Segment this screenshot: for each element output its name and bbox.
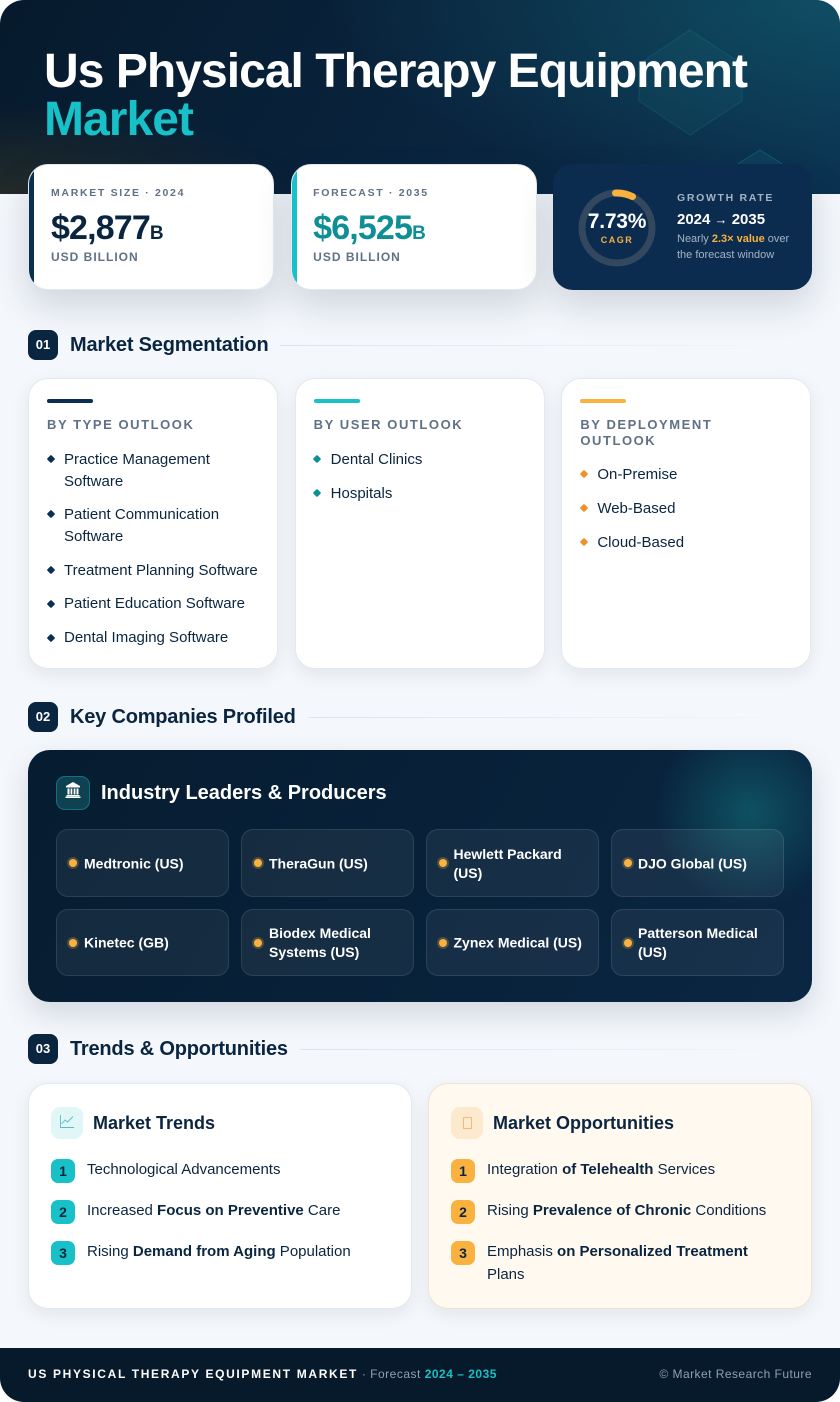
- company: Patterson: [611, 909, 784, 976]
- icon: bank building: [56, 776, 90, 810]
- growth rate text: GROWTH RATE: [677, 192, 774, 204]
- panel: by type outlook: Dental Imaging Software: [64, 629, 228, 646]
- stat card: forecast: FORECAST · 2035: [313, 187, 429, 199]
- section heading 02: [28, 702, 634, 732]
- panel: by type outlook: [28, 378, 278, 669]
- panel: market opportunities: Emphasis on Personalized Treatment: [487, 1243, 748, 1260]
- company: TheraGun: [241, 829, 414, 897]
- icon: opportunity placeholder: [451, 1107, 483, 1139]
- panel: by type outlook: Software: [64, 528, 123, 545]
- section heading 03: 03: [36, 1041, 50, 1056]
- section heading 03: [28, 1034, 632, 1064]
- section heading 01: 01: [36, 337, 50, 352]
- stat card: market size: [28, 164, 274, 290]
- stat card: growth rate: [553, 164, 812, 290]
- stat card: forecast: USD BILLION: [313, 250, 401, 264]
- panel: by deployment outlook: BY DEPLOYMENT: [580, 417, 712, 432]
- company: Hewlett Packard: Hewlett Packard (US): [454, 846, 562, 881]
- company: DJO Global: DJO Global (US): [638, 856, 747, 872]
- company: Hewlett Packard: [426, 829, 599, 897]
- company: Kinetec: [56, 909, 229, 976]
- panel: by deployment outlook: OUTLOOK: [580, 433, 656, 448]
- panel: market trends: 2: [59, 1204, 67, 1220]
- stat card: growth rate: 2024 → 2035: [677, 211, 765, 228]
- panel: market opportunities: 1: [459, 1163, 467, 1179]
- company: Zynex: Zynex Medical (US): [454, 934, 582, 950]
- stat card: market size: USD BILLION: [51, 250, 139, 264]
- panel: industry leaders: [28, 750, 812, 1002]
- decorative hexagons: [638, 30, 783, 164]
- panel: market trends: 1: [59, 1163, 67, 1179]
- company: Biodex: Biodex Medical Systems (US): [269, 924, 371, 960]
- panel heading: Industry Leaders & Producers: [101, 782, 387, 804]
- panel: by user outlook: BY USER OUTLOOK: [314, 417, 463, 432]
- company: Medtronic: Medtronic (US): [84, 856, 184, 872]
- panel: by type outlook: Software: [64, 473, 123, 490]
- section heading 02: 02: [36, 709, 50, 724]
- panel: by user outlook: [295, 378, 545, 669]
- card heading: Market Trends: [93, 1113, 215, 1133]
- company: Medtronic: [56, 829, 229, 897]
- footer title: US PHYSICAL THERAPY EQUIPMENT MARKET · Forecast 2024 – 2035: [28, 1367, 497, 1381]
- panel: by type outlook: Treatment Planning Software: [64, 562, 258, 579]
- panel: by type outlook: Practice Management: [64, 451, 210, 468]
- stat card: market size: $2,877B: [51, 209, 164, 247]
- panel: by type outlook: Patient Education Software: [64, 595, 245, 612]
- title: Market: [44, 92, 193, 146]
- panel: by deployment outlook: Cloud-Based: [597, 534, 684, 551]
- stat card: growth rate: the forecast window: [677, 249, 774, 261]
- panel: by user outlook: Hospitals: [331, 485, 392, 502]
- panel: by user outlook: Dental Clinics: [331, 451, 422, 468]
- CAGR value: 7.73%: [588, 210, 646, 233]
- company: TheraGun: TheraGun (US): [269, 856, 368, 872]
- panel: market trends: Technological Advancements: [87, 1160, 280, 1178]
- section heading 01: [28, 330, 624, 360]
- panel: market opportunities: Plans: [487, 1266, 525, 1283]
- panel: by deployment outlook: [561, 378, 811, 669]
- company: Biodex: [241, 909, 414, 976]
- panel: by deployment outlook: On-Premise: [597, 466, 677, 483]
- panel: by deployment outlook: Web-Based: [597, 500, 675, 517]
- panel: market trends: Increased Focus on Preventive Care: [87, 1202, 340, 1218]
- section heading 02: Key Companies Profiled: [70, 706, 296, 728]
- stat card: forecast: [291, 164, 537, 290]
- panel: by type outlook: BY TYPE OUTLOOK: [47, 417, 194, 432]
- footer: [0, 1348, 840, 1402]
- company: Kinetec: Kinetec (GB): [84, 934, 169, 950]
- company: Patterson: Patterson Medical (US): [638, 924, 758, 960]
- section heading 03: Trends & Opportunities: [70, 1038, 288, 1060]
- panel: market opportunities: 2: [459, 1204, 467, 1220]
- company: Zynex: [426, 909, 599, 976]
- card heading: Market Opportunities: [493, 1113, 674, 1133]
- stat card: growth rate: Nearly 2.3× value over: [677, 233, 789, 245]
- title: [44, 44, 748, 146]
- icon: line chart: [51, 1107, 83, 1139]
- CAGR ring: [578, 190, 656, 266]
- company: DJO Global: [611, 829, 784, 897]
- panel: market opportunities: Rising Prevalence of Chronic Conditions: [487, 1202, 766, 1218]
- panel: market trends: Rising Demand from Aging Population: [87, 1242, 351, 1260]
- panel: market opportunities: Integration of Telehealth Services: [487, 1160, 715, 1178]
- title: Us Physical Therapy Equipment: [44, 44, 747, 98]
- CAGR label: CAGR: [601, 235, 633, 245]
- section heading 01: Market Segmentation: [70, 334, 268, 356]
- stat card: forecast: $6,525B: [313, 209, 426, 247]
- panel: market trends: 3: [59, 1245, 67, 1261]
- header banner: [0, 0, 840, 194]
- panel: market opportunities: [428, 1083, 812, 1309]
- stat card: market size: MARKET SIZE · 2024: [51, 187, 185, 199]
- panel: by type outlook: Patient Communication: [64, 506, 219, 523]
- panel: market trends: [28, 1083, 412, 1309]
- panel: market opportunities: 3: [459, 1245, 467, 1261]
- footer credit: © Market Research Future: [659, 1367, 812, 1381]
